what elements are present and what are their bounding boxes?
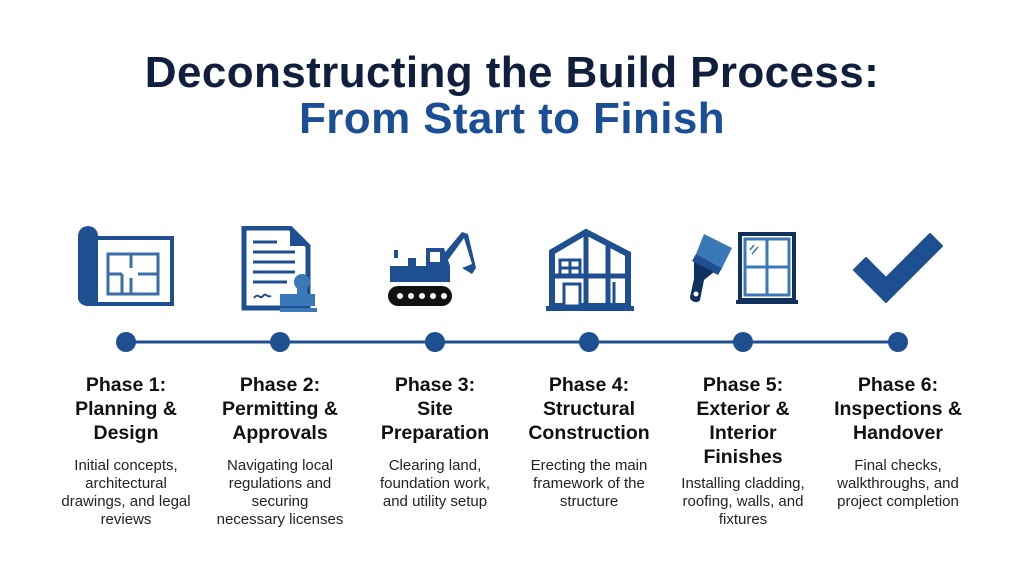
phase 5: Exterior & bbox=[696, 398, 790, 420]
phase 2: Permitting & bbox=[222, 398, 338, 420]
phase 1: Phase 1: bbox=[86, 374, 166, 396]
phase 6: Final checks, bbox=[854, 457, 942, 474]
icon: excavator bbox=[388, 232, 476, 306]
phase 4: Phase 4: bbox=[549, 374, 629, 396]
phase 3: Preparation bbox=[381, 422, 489, 444]
icon: checkmark bbox=[853, 233, 943, 303]
phase 6: walkthroughs, and bbox=[837, 475, 959, 492]
phase 5: fixtures bbox=[719, 511, 767, 528]
phase 4 bbox=[528, 374, 650, 510]
phase 2: Phase 2: bbox=[240, 374, 320, 396]
phase 6: Inspections & bbox=[834, 398, 962, 420]
phase 2: Approvals bbox=[232, 422, 328, 444]
title bbox=[145, 48, 879, 143]
icon: blueprint bbox=[78, 226, 174, 306]
phase 3: Clearing land, bbox=[389, 457, 481, 474]
phase 3: Site bbox=[417, 398, 453, 420]
phase 2: Navigating local bbox=[227, 457, 333, 474]
phase 1 bbox=[61, 374, 191, 528]
phase 2: regulations and bbox=[229, 475, 331, 492]
phase 6: project completion bbox=[837, 493, 959, 510]
phase 4: Construction bbox=[528, 422, 650, 444]
phase 2 bbox=[217, 374, 343, 528]
icon: building frame bbox=[546, 228, 634, 311]
icon: permit document bbox=[242, 226, 317, 312]
phase 5: Interior bbox=[709, 422, 777, 444]
phase 4: Structural bbox=[543, 398, 635, 420]
icon: paintbrush and window bbox=[690, 232, 798, 304]
phase 3 bbox=[380, 374, 490, 510]
phase 1: drawings, and legal bbox=[61, 493, 191, 510]
phase 5: Phase 5: bbox=[703, 374, 783, 396]
phase 6: Phase 6: bbox=[858, 374, 938, 396]
phase 6 bbox=[834, 374, 962, 510]
phase 1: reviews bbox=[101, 511, 151, 528]
phase 1: architectural bbox=[85, 475, 167, 492]
phase 4: framework of the bbox=[533, 475, 645, 492]
phase 3: and utility setup bbox=[383, 493, 487, 510]
phase 5 bbox=[681, 374, 805, 528]
phase 1: Design bbox=[93, 422, 158, 444]
timeline bbox=[116, 332, 908, 352]
phase 5: Finishes bbox=[703, 446, 783, 468]
phase 6: Handover bbox=[853, 422, 943, 444]
phase 4: Erecting the main bbox=[531, 457, 647, 474]
phase 3: foundation work, bbox=[380, 475, 490, 492]
phase 5: Installing cladding, bbox=[681, 475, 805, 492]
phase 2: securing bbox=[252, 493, 308, 510]
phase 5: roofing, walls, and bbox=[683, 493, 803, 510]
phase 3: Phase 3: bbox=[395, 374, 475, 396]
phase 1: Planning & bbox=[75, 398, 177, 420]
title: Deconstructing the Build Process: bbox=[145, 48, 879, 97]
phase 4: structure bbox=[560, 493, 618, 510]
title: From Start to Finish bbox=[299, 94, 725, 143]
phase 2: necessary licenses bbox=[217, 511, 343, 528]
phase 1: Initial concepts, bbox=[74, 457, 178, 474]
